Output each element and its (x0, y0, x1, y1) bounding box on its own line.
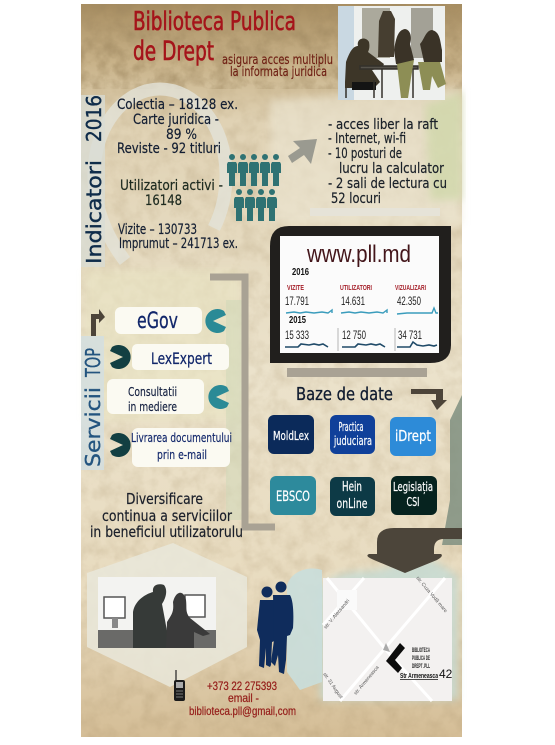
text block: collection indicators: Reviste - 92 titluri (117, 141, 221, 157)
heading: Indicatori 2016 (81, 95, 106, 267)
button: Legislatia CSI: CSI (406, 495, 420, 509)
statistics 2015: 2015 (289, 315, 306, 326)
panel: location map: DREPT .PLL (412, 664, 430, 670)
button: Practica juduciara (330, 415, 375, 454)
statistics 2015: 12 750 (342, 330, 366, 342)
heading: Servicii TOP: Servicii (81, 387, 105, 467)
service: LexExpert: LexExpert (151, 349, 212, 368)
button: Practica juduciara: juduciara (333, 434, 372, 448)
street names: str. Cuza Vodă mare (414, 575, 448, 614)
button: MoldLex (268, 415, 314, 454)
street names: str. V. Alecsandri (323, 598, 351, 630)
panel: website statistics monitor (270, 226, 451, 363)
statistics 2016: VIZUALIZARI (395, 285, 426, 292)
icon: group of people (227, 154, 281, 221)
text block: active users: 16148 (145, 193, 182, 209)
button: iDrept (390, 417, 436, 456)
button: Hein onLine: onLine (336, 497, 368, 512)
text block: facilities: - Internet, wi-fi (328, 131, 406, 147)
text block: visits and loans: Imprumut – 241713 ex. (119, 236, 238, 252)
statistics 2015: 15 333 (285, 330, 309, 342)
contact details: +373 22 275393 (207, 679, 277, 693)
photo: library readers (338, 6, 446, 100)
statistics 2015 (285, 315, 437, 351)
text block: diversification: in beneficiul utilizatorulu (90, 523, 243, 541)
button: Practica juduciara: Practica (338, 420, 364, 434)
heading: Indicatori 2016: 2016 (82, 95, 106, 142)
service: Livrarea documentului prin e-mail: Livrarea documentului (131, 431, 232, 445)
heading: Servicii TOP: TOP (81, 348, 105, 378)
arrow: large dark down arrow (367, 528, 462, 573)
subtitle: la informata juridica (230, 65, 327, 80)
text block: diversification: Diversificare (126, 490, 203, 508)
text block: active users (120, 178, 223, 209)
arrow: dark elbow to databases (411, 389, 447, 410)
button: Legislatia CSI: Legislația (393, 480, 433, 494)
text block: collection indicators: 89 % (166, 127, 197, 143)
button: Hein onLine: Hein (342, 480, 362, 495)
service: eGov (115, 307, 226, 334)
text block: collection indicators (117, 97, 238, 157)
text block: diversification (90, 490, 243, 541)
panel: location map (321, 575, 453, 701)
icon: teal chevron (205, 309, 226, 333)
statistics 2016: VIZITE (287, 285, 304, 292)
panel: location map: BIBLIOTECA (412, 648, 430, 654)
street names: str. 31 August (321, 672, 344, 700)
statistics 2016: 17.791 (285, 296, 309, 308)
statistics 2016 (285, 267, 438, 314)
service: Consultatii in mediere: in mediere (128, 400, 177, 414)
service: Consultatii in mediere (107, 379, 229, 414)
panel: aged paper background (81, 4, 462, 737)
icon: teal chevron (208, 385, 229, 409)
service: eGov: eGov (137, 309, 178, 334)
text block: facilities: - acces liber la raft (328, 117, 438, 133)
service: Consultatii in mediere: Consultatii (128, 385, 177, 399)
panel: location map: PUBLICA DE (412, 656, 430, 662)
icon: mobile phone (174, 670, 185, 701)
button: Hein onLine (330, 477, 375, 516)
text block: visits and loans: Vizite – 130733 (118, 222, 197, 238)
text block: active users: Utilizatori activi - (120, 178, 223, 194)
subtitle (222, 53, 333, 80)
service: Livrarea documentului prin e-mail: prin e-mail (157, 448, 207, 462)
connector: grey bracket (210, 277, 275, 527)
statistics 2015: 34 731 (398, 330, 422, 342)
subtitle: asigura acces multiplu (222, 53, 333, 68)
heading: Baze de date: Baze de date (296, 384, 393, 405)
statistics 2016: 2016 (292, 267, 309, 278)
arrow: dark elbow at services (91, 309, 105, 336)
decorative ring (94, 89, 226, 261)
text block: facilities: lucru la calculator (339, 161, 444, 177)
icon: dark chevron (110, 433, 131, 457)
text block: facilities: - 10 posturi de (328, 146, 402, 162)
service: LexExpert (110, 344, 229, 370)
text block: facilities: 52 locuri (331, 191, 381, 207)
address: Str Armeneasca (400, 671, 439, 680)
button: MoldLex: MoldLex (273, 429, 309, 443)
heading: Servicii TOP (81, 336, 105, 470)
button: EBSCO: EBSCO (276, 489, 310, 505)
text block: collection indicators: Colectia – 18128 ex. (117, 97, 238, 113)
panel: location map: 42 (439, 667, 453, 681)
text block: facilities: - 2 sali de lectura cu (328, 176, 447, 192)
contact details (189, 679, 296, 718)
button: Legislatia CSI (391, 476, 437, 515)
icon: dark chevron (110, 345, 131, 369)
contact details: email - (228, 691, 259, 705)
street names: str. Armeneasca (353, 665, 381, 696)
text block: facilities (328, 117, 447, 207)
website address: www.pll.md (306, 241, 411, 268)
library logo (386, 643, 405, 673)
service: Livrarea documentului prin e-mail (110, 428, 232, 467)
statistics 2016: 14.631 (341, 296, 365, 308)
database buttons (268, 415, 437, 516)
contact details: biblioteca.pll@gmail,com (189, 704, 296, 718)
arrow: grey pointing up right (288, 139, 317, 164)
street names (321, 575, 448, 700)
title (133, 7, 296, 67)
text block: diversification: continua a serviciilor (102, 507, 233, 525)
heading: Indicatori 2016: Indicatori (82, 160, 106, 264)
title: Biblioteca Publica (133, 7, 296, 37)
statistics 2016: UTILIZATORI (340, 285, 372, 292)
button: iDrept: iDrept (395, 427, 431, 445)
photo: office workers (98, 577, 216, 648)
text block: visits and loans (118, 222, 238, 252)
text block: collection indicators: Carte juridica - (133, 112, 219, 128)
icon: couple silhouette (257, 582, 293, 674)
statistics 2016: 42.350 (397, 296, 421, 308)
title: de Drept (133, 36, 214, 67)
button: EBSCO (270, 476, 316, 515)
